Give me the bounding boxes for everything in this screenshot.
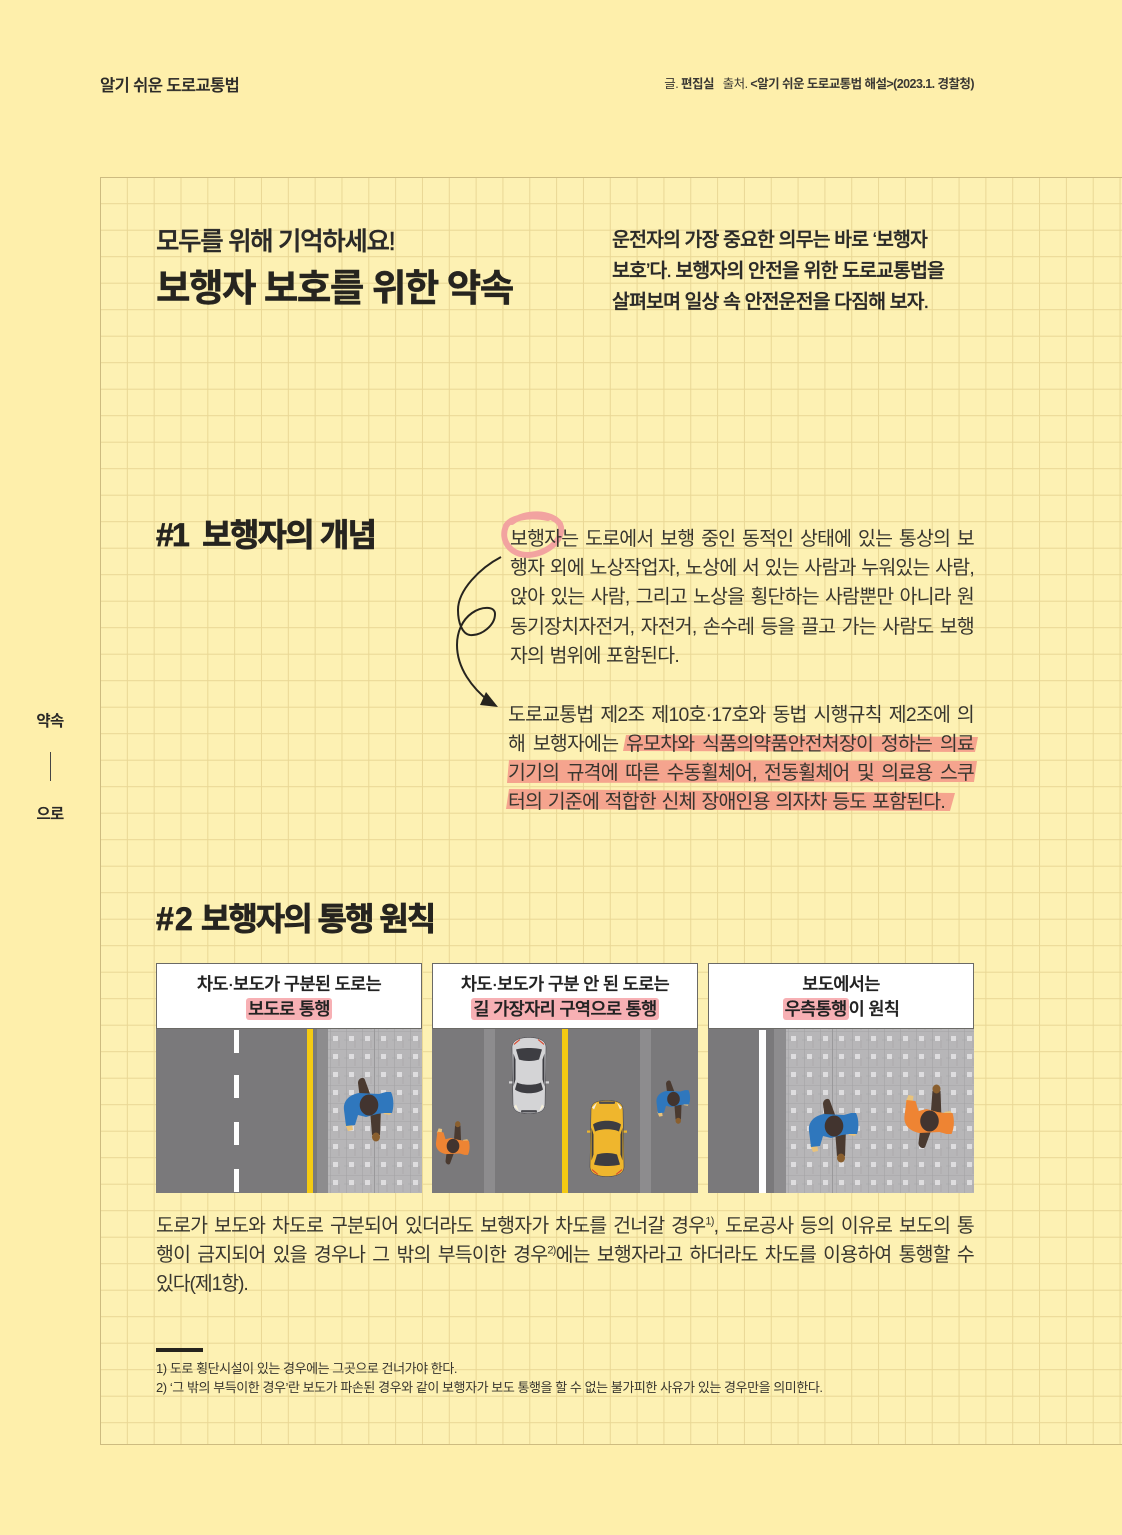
section 2 paragraph: 도로가 보도와 차도로 구분되어 있더라도 보행자가 차도를 건너갈 경우1), 도로공사 등의 이유로 보도의 통: [156, 1215, 974, 1237]
credit line: 글. 편집실 출처. <알기 쉬운 도로교통법 해설>(2023.1. 경찰청): [664, 77, 974, 91]
silver car: [509, 1038, 549, 1114]
panel 2 header: 차도·보도가 구분 안 된 도로는: [461, 974, 669, 994]
pink circle: [504, 514, 561, 555]
section 1 paragraph: [508, 528, 974, 813]
footnotes: 1) 도로 횡단시설이 있는 경우에는 그곳으로 건너가야 한다.: [156, 1361, 457, 1376]
side tab: section label: [36, 712, 64, 823]
section 1 paragraph: 도로교통법 제2조 제10호·17호와 동법 시행규칙 제2조에 의: [508, 704, 974, 726]
section 1 paragraph: 행자 외에 노상작업자, 노상에 서 있는 사람과 누워있는 사람,: [510, 557, 974, 579]
highlight marks and scribble arrow: [456, 511, 978, 811]
panel 1 header: 보도로 통행: [248, 999, 330, 1019]
section 1 paragraph: 자의 범위에 포함된다.: [510, 645, 679, 667]
section 2 paragraph: [156, 1215, 974, 1295]
intro text: [612, 229, 944, 313]
top left series label: 알기 쉬운 도로교통법: [100, 77, 239, 95]
panel 1 header: 차도·보도가 구분된 도로는: [197, 974, 381, 994]
pedestrian in blue: [809, 1099, 858, 1162]
panel 1 illustration: [156, 1029, 422, 1193]
panel 3 header: [708, 963, 974, 1029]
section 2 paragraph: 행이 금지되어 있을 경우나 그 밖의 부득이한 경우2)에는 보행자라고 하더라도 차도를 이용하여 통행할 수: [156, 1244, 974, 1266]
panel 3 header: 보도에서는: [802, 974, 880, 994]
section 2 paragraph: 있다(제1항).: [156, 1273, 248, 1295]
kicker heading: 모두를 위해 기억하세요!: [156, 228, 394, 256]
panel 2 header: [432, 963, 698, 1029]
pedestrian in blue: [344, 1078, 393, 1142]
pedestrian in orange: [436, 1121, 470, 1164]
intro text: 보호’다. 보행자의 안전을 위한 도로교통법을: [612, 260, 944, 282]
footnotes: 2) ‘그 밖의 부득이한 경우’란 보도가 파손된 경우와 같이 보행자가 보도 통행을 할 수 없는 불가피한 사유가 있는 경우만을 의미한다.: [156, 1380, 823, 1394]
heading #2: #2 보행자의 통행 원칙: [156, 901, 434, 937]
footnotes: [156, 1361, 823, 1394]
intro text: 운전자의 가장 중요한 의무는 바로 ‘보행자: [612, 229, 927, 251]
section 1 paragraph: 앉아 있는 사람, 그리고 노상을 횡단하는 사람뿐만 아니라 원: [510, 586, 974, 608]
panel 2 header: 길 가장자리 구역으로 통행: [473, 999, 657, 1019]
panel 3 illustration: [708, 1029, 974, 1193]
section 1 paragraph: 동기장치자전거, 자전거, 손수레 등을 끌고 가는 사람도 보행: [510, 616, 974, 638]
footnote rule: [156, 1348, 203, 1352]
pedestrian in blue: [656, 1081, 690, 1124]
main title: 보행자 보호를 위한 약속: [156, 267, 513, 309]
section 1 paragraph: 해 보행자에는 유모차와 식품의약품안전처장이 정하는 의료: [508, 733, 974, 755]
side tab: section label: 으로: [36, 806, 64, 823]
section 1 paragraph: 기기의 규격에 따른 수동휠체어, 전동휠체어 및 의료용 스쿠: [508, 762, 974, 784]
panel 3 header: 우측통행이 원칙: [785, 999, 899, 1019]
panel 1 header: [156, 963, 422, 1029]
salmon highlight: [506, 735, 978, 811]
yellow car: [587, 1100, 627, 1176]
panel 2 illustration: [432, 1029, 698, 1193]
intro text: 살펴보며 일상 속 안전운전을 다짐해 보자.: [612, 291, 928, 313]
section 1 paragraph: 터의 기준에 적합한 신체 장애인용 의자차 등도 포함된다.: [508, 791, 945, 813]
pedestrian in orange: [904, 1084, 954, 1148]
curly arrow: [457, 557, 501, 707]
side tab: section label: 약속: [36, 713, 64, 730]
heading #1: #1 보행자의 개념: [156, 517, 375, 553]
section 1 paragraph: 보행자는 도로에서 보행 중인 동적인 상태에 있는 통상의 보: [510, 528, 974, 550]
